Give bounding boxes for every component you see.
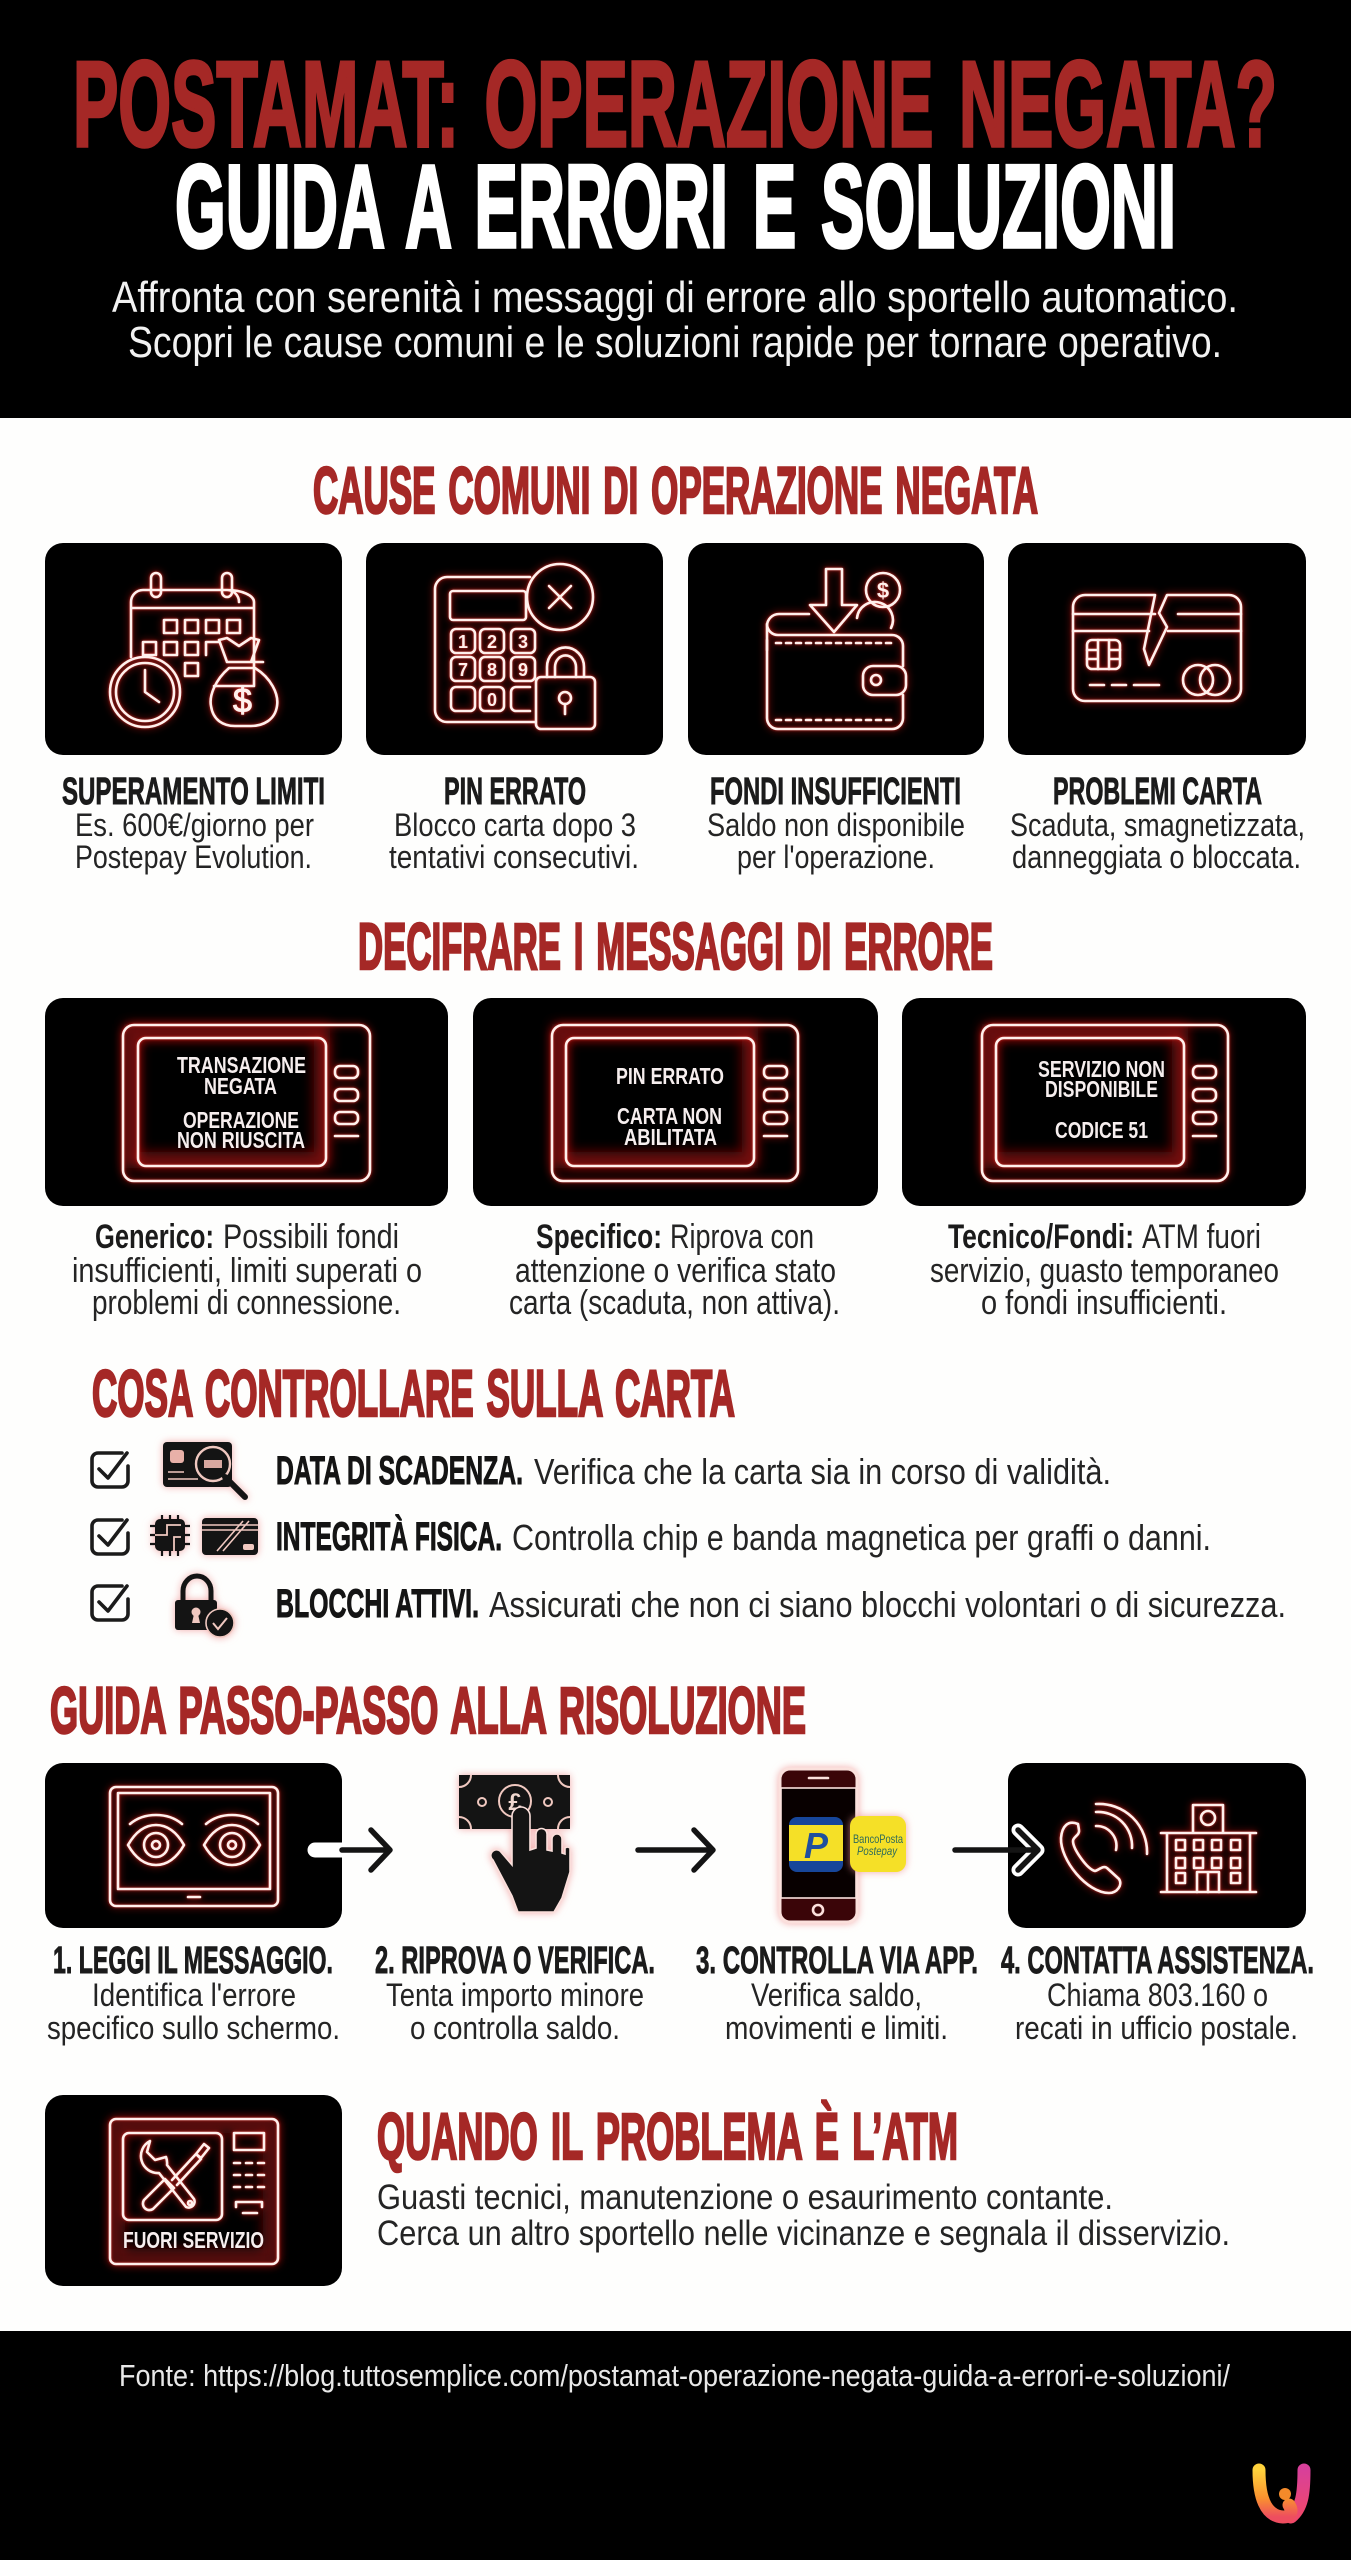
panel: messaggio generico	[45, 998, 448, 1206]
text: step 2: 2. RIPROVA O VERIFICA.	[375, 1940, 655, 1982]
icon: atm screen 3: CODICE 51	[1055, 1117, 1148, 1143]
icon: banknote and hand: £	[508, 1789, 522, 1816]
text: generico: Generico:	[95, 1218, 214, 1256]
icon: atm screen 1	[123, 1025, 370, 1181]
icon: card with magnifier	[163, 1442, 245, 1497]
icon: keypad with lock	[435, 564, 595, 729]
icon: phone and post office	[1061, 1804, 1256, 1893]
icon: chip and scratched card	[150, 1515, 258, 1556]
icon: atm screen 1: OPERAZIONE	[183, 1107, 299, 1133]
icon: lock with check	[175, 1576, 234, 1637]
panel: fondi insufficienti	[688, 543, 984, 755]
label: problemi carta: Scaduta, smagnetizzata,	[1010, 807, 1305, 843]
icon: bancoposta app: Postepay	[857, 1844, 898, 1858]
icon: atm screen 1: NON RIUSCITA	[177, 1127, 305, 1153]
icon: banknote and hand	[459, 1775, 570, 1912]
icon: wallet with coins and arrow: $	[877, 578, 889, 603]
label: superamento limiti: SUPERAMENTO LIMITI	[62, 771, 325, 813]
icon: checkboxes	[92, 1453, 128, 1620]
label: problemi carta: danneggiata o bloccata.	[1012, 839, 1301, 875]
icon: phone with apps	[780, 1769, 906, 1922]
icon: bancoposta app	[850, 1816, 906, 1872]
text: specifico: Riprova con	[670, 1218, 814, 1256]
arrow 2	[638, 1830, 713, 1870]
panel: atm fuori servizio	[45, 2095, 342, 2286]
text: data di scadenza: DATA DI SCADENZA.	[276, 1449, 523, 1493]
label: superamento limiti	[62, 771, 325, 875]
label: fondi insufficienti: Saldo non disponibile	[707, 807, 965, 843]
label: fondi insufficienti: per l'operazione.	[737, 839, 935, 875]
panel: step 4	[1008, 1763, 1306, 1928]
panel: superamento limiti	[45, 543, 342, 755]
text: step 2	[375, 1940, 655, 2046]
icon: atm screen 2: ABILITATA	[624, 1124, 717, 1150]
text: tecnico	[930, 1218, 1279, 1322]
text: step 4: Chiama 803.160 o	[1047, 1977, 1268, 2013]
text: quando il problema	[377, 2178, 1230, 2253]
text: specifico	[509, 1218, 840, 1322]
icon: broken atm with tools	[110, 2119, 278, 2264]
text: step 1	[47, 1940, 340, 2046]
text: quando il problema: Guasti tecnici, manutenzione o esaurimento contante.	[377, 2178, 1113, 2217]
label: fondi insufficienti: FONDI INSUFFICIENTI	[710, 771, 961, 813]
icon: keypad with lock: 2	[487, 632, 497, 652]
text: blocchi attivi	[276, 1582, 1286, 1626]
label: superamento limiti: Postepay Evolution.	[75, 839, 312, 875]
icon: keypad with lock: 7	[458, 660, 468, 680]
text: data di scadenza: Verifica che la carta sia in corso di validità.	[534, 1451, 1111, 1492]
text: step 2: o controlla saldo.	[410, 2010, 620, 2046]
icon: atm screen 3: SERVIZIO NON	[1038, 1056, 1165, 1082]
arrow 1	[315, 1830, 390, 1870]
label: pin errato: Blocco carta dopo 3	[394, 807, 636, 843]
icon: atm screen 3	[982, 1025, 1228, 1181]
text: tecnico: Tecnico/Fondi:	[948, 1218, 1134, 1256]
icon: keypad with lock: 8	[487, 660, 497, 680]
text: specifico: attenzione o verifica stato	[515, 1252, 836, 1290]
icon: postepay app	[789, 1817, 843, 1872]
panel: messaggio tecnico	[902, 998, 1306, 1206]
subtitle	[112, 273, 1238, 367]
label: superamento limiti: Es. 600€/giorno per	[75, 807, 314, 843]
panel: messaggio specifico	[473, 998, 878, 1206]
text: blocchi attivi: BLOCCHI ATTIVI.	[276, 1582, 479, 1626]
icon: atm screen 1: TRANSAZIONE	[177, 1052, 306, 1078]
icon: keypad with lock: 0	[487, 690, 497, 710]
text: step 4: recati in ufficio postale.	[1015, 2010, 1298, 2046]
icon: keypad with lock: 9	[518, 660, 528, 680]
icon: atm screen 2	[552, 1025, 798, 1181]
text: step 1: specifico sullo schermo.	[47, 2010, 340, 2046]
icon: broken card	[1073, 595, 1241, 701]
text: tecnico: o fondi insufficienti.	[981, 1284, 1227, 1322]
icon: postepay app: P	[804, 1825, 829, 1866]
text: tecnico: ATM fuori	[1142, 1218, 1261, 1256]
text: specifico: Specifico:	[536, 1218, 662, 1256]
checklist	[92, 1442, 1286, 1637]
arrow 3	[955, 1830, 1038, 1870]
text: integrità fisica: INTEGRITÀ FISICA.	[276, 1514, 502, 1559]
icon: broken atm with tools: FUORI SERVIZIO	[123, 2227, 264, 2253]
text: step 2: Tenta importo minore	[386, 1977, 644, 2013]
text: generico: problemi di connessione.	[92, 1284, 401, 1322]
label: pin errato	[389, 771, 639, 875]
text: generico	[72, 1218, 422, 1322]
text: integrità fisica: Controlla chip e banda magnetica per graffi o danni.	[512, 1517, 1211, 1558]
icon: atm screen 1: NEGATA	[204, 1073, 277, 1099]
text: integrità fisica	[276, 1514, 1211, 1559]
text: step 3: movimenti e limiti.	[725, 2010, 948, 2046]
icon: bancoposta app: BancoPosta	[853, 1832, 903, 1846]
icon: calendar, clock and money bag: $	[233, 682, 252, 720]
text: step 3: 3. CONTROLLA VIA APP.	[696, 1940, 978, 1982]
label: fondi insufficienti	[707, 771, 965, 875]
text: step 1: 1. LEGGI IL MESSAGGIO.	[53, 1940, 333, 1982]
panel: step 1	[45, 1763, 342, 1928]
text: generico: Possibili fondi	[223, 1218, 399, 1256]
icon: calendar, clock and money bag	[110, 573, 277, 727]
icon: atm screen 2: PIN ERRATO	[616, 1063, 724, 1089]
text: generico: insufficienti, limiti superati o	[72, 1252, 422, 1290]
text: tecnico: servizio, guasto temporaneo	[930, 1252, 1279, 1290]
panel: problemi carta	[1008, 543, 1306, 755]
label: pin errato: PIN ERRATO	[444, 771, 586, 813]
heading: cosa controllare: COSA CONTROLLARE SULLA CARTA	[92, 1356, 735, 1430]
text: step 3	[696, 1940, 978, 2046]
icon: wallet with coins and arrow	[767, 569, 906, 729]
panel: pin errato	[366, 543, 663, 755]
icon: atm screen 2: CARTA NON	[617, 1103, 722, 1129]
label: problemi carta	[1010, 771, 1305, 875]
cause labels	[62, 771, 1305, 875]
text: step 4	[1001, 1940, 1314, 2046]
text: data di scadenza	[276, 1449, 1111, 1493]
icon: keypad with lock: 3	[518, 632, 528, 652]
label: pin errato: tentativi consecutivi.	[389, 839, 639, 875]
header band	[0, 0, 1351, 418]
message descriptions	[72, 1218, 1279, 1322]
text: step 3: Verifica saldo,	[751, 1977, 922, 2013]
footer band	[0, 2331, 1351, 2560]
step labels	[47, 1940, 1314, 2046]
text: step 1: Identifica l'errore	[92, 1977, 296, 2013]
text: quando il problema: Cerca un altro sportello nelle vicinanze e segnala il disservizio.	[377, 2214, 1230, 2253]
icon: atm screen 3: DISPONIBILE	[1045, 1076, 1158, 1102]
icon: logo	[1259, 2470, 1304, 2517]
icon: keypad with lock: 1	[458, 632, 468, 652]
text: specifico: carta (scaduta, non attiva).	[509, 1284, 840, 1322]
icon: monitor with eyes	[110, 1787, 278, 1906]
